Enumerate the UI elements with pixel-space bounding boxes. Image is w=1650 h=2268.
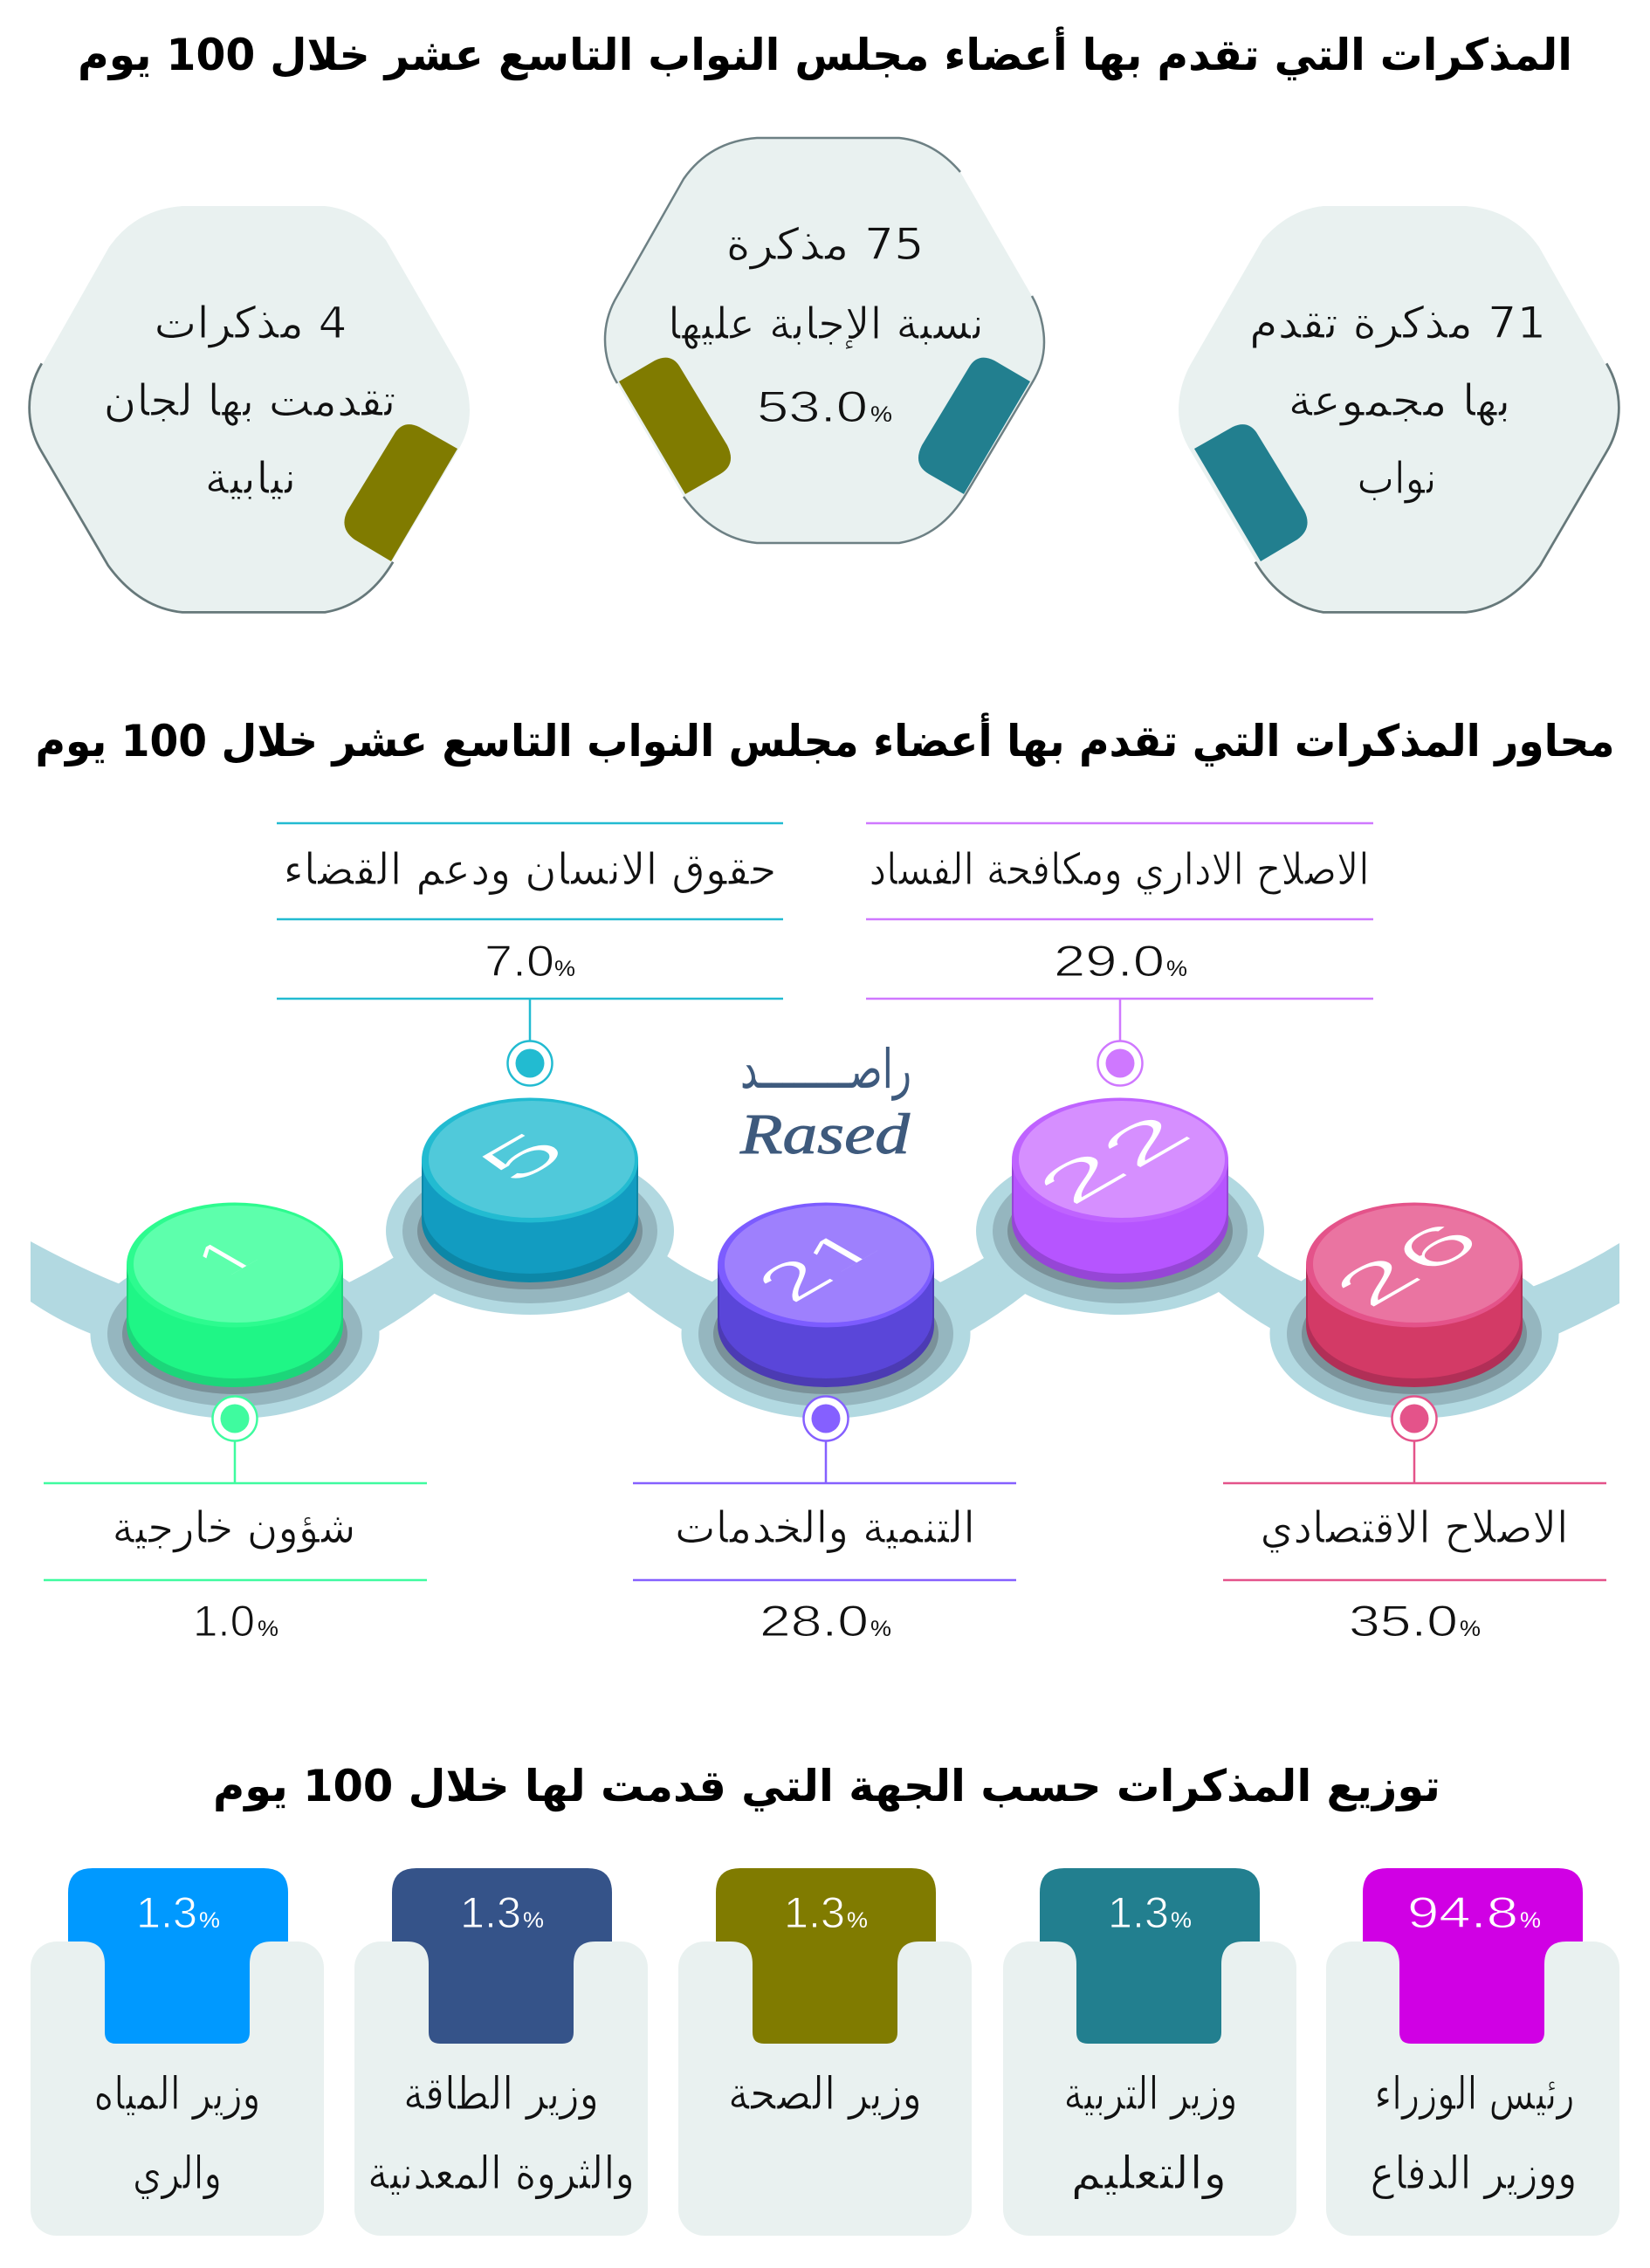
- logo: Rased: راصــــــــد: [740, 1037, 911, 1101]
- card: minister of health: %: [847, 1908, 868, 1933]
- card: minister of energy: وزير الطاقة: [403, 2068, 599, 2120]
- drum: 26 economic reform: 26: [1314, 1211, 1500, 1318]
- card: minister of education: %: [1171, 1908, 1192, 1933]
- text: committees: نيابية: [204, 453, 297, 504]
- card: minister of energy: 1.3: [460, 1888, 521, 1937]
- card: minister of health: وزير الصحة: [728, 2068, 922, 2120]
- card: minister of education: 1.3: [1108, 1888, 1169, 1937]
- callout: economic reform: الاصلاح الاقتصادي: [1261, 1502, 1568, 1553]
- callout: development and services: %: [870, 1617, 891, 1641]
- callout: economic reform: [1223, 1397, 1606, 1646]
- card: minister of education: والتعليم: [1070, 2148, 1227, 2200]
- callout: foreign affairs: 1.0: [193, 1597, 255, 1646]
- callout: human rights: حقوق الانسان ودعم القضاء: [283, 844, 777, 896]
- callout: development and services: 28.0: [760, 1597, 869, 1646]
- card: minister of water: والري: [133, 2148, 222, 2200]
- tab: olive accent: [619, 358, 731, 494]
- text: total: [668, 219, 984, 431]
- tab: teal accent: [918, 358, 1030, 494]
- card: prime minister and defence: رئيس الوزراء: [1374, 2068, 1575, 2120]
- callout: human rights: %: [554, 957, 575, 981]
- drum: 26 economic reform: [1269, 1203, 1559, 1419]
- drum: 22 administrative reform: 22: [1016, 1103, 1210, 1216]
- card: minister of education: وزير التربية: [1063, 2068, 1238, 2120]
- drum: 1 foreign affairs: 1: [176, 1229, 278, 1288]
- callout: development and services: التنمية والخدمات: [675, 1502, 975, 1554]
- card: minister of energy: %: [523, 1908, 544, 1933]
- card: minister of energy: والثروة المعدنية: [368, 2148, 635, 2200]
- callout: administrative reform: %: [1166, 957, 1187, 981]
- text: committees: تقدمت بها لجان: [103, 375, 396, 427]
- callout: administrative reform: الاصلاح الاداري ومكافحة الفساد: [870, 844, 1369, 896]
- callout: economic reform: %: [1460, 1617, 1481, 1641]
- card: minister of water: %: [199, 1908, 220, 1933]
- callout: development and services: [633, 1397, 1016, 1646]
- callout: foreign affairs: %: [258, 1617, 278, 1641]
- text: groups: نواب: [1357, 453, 1437, 504]
- drum: 5 human rights: [386, 1098, 674, 1315]
- panel: MP groups hexagon: [1179, 206, 1618, 611]
- card: prime minister and defence: [1326, 1868, 1619, 2236]
- drum: 5 human rights: 5: [459, 1120, 585, 1193]
- text: committees: [103, 298, 396, 504]
- callout: human rights: 7.0: [485, 937, 554, 986]
- panel: total hexagon: [605, 138, 1044, 543]
- card: minister of health: 1.3: [784, 1888, 845, 1937]
- drum: 22 administrative reform: [976, 1098, 1264, 1315]
- chart: road with five drums: [31, 1098, 1619, 1419]
- drum: 1 foreign affairs: [91, 1203, 379, 1419]
- card: prime minister and defence: ووزير الدفاع: [1371, 2148, 1577, 2200]
- card: prime minister and defence: 94.8: [1407, 1888, 1518, 1937]
- text: total: 75 مذكرة: [726, 219, 924, 270]
- logo: Rased: Rased: [739, 1103, 911, 1166]
- text: total: نسبة الإجابة عليها: [668, 299, 984, 350]
- logo: Rased: [739, 1037, 911, 1166]
- card: minister of water: وزير المياه: [94, 2068, 260, 2120]
- card: minister of health: [678, 1868, 972, 2236]
- callout: human rights: [277, 823, 783, 1086]
- card: minister of water: [31, 1868, 324, 2236]
- callout: foreign affairs: [44, 1397, 427, 1646]
- callout: administrative reform: [866, 823, 1373, 1086]
- card: prime minister and defence: %: [1520, 1908, 1541, 1933]
- panel: committees hexagon: [31, 206, 470, 611]
- title: section three: توزيع المذكرات حسب الجهة التي قدمت لها خلال 100 يوم: [213, 1761, 1440, 1812]
- text: total: 53.0: [757, 382, 868, 431]
- road band: [31, 1241, 1619, 1336]
- text: groups: 71 مذكرة تقدم: [1249, 298, 1546, 348]
- text: committees: 4 مذكرات: [155, 298, 347, 348]
- callout: foreign affairs: شؤون خارجية: [112, 1502, 356, 1554]
- title: section one: المذكرات التي تقدم بها أعضاء مجلس النواب التاسع عشر خلال 100 يوم: [78, 26, 1572, 81]
- card: minister of energy: [354, 1868, 648, 2236]
- text: total: %: [870, 402, 892, 427]
- tab: teal accent: [1194, 424, 1308, 561]
- card: minister of education: [1003, 1868, 1296, 2236]
- drum: 21 development: [681, 1203, 971, 1419]
- text: groups: [1249, 298, 1546, 504]
- card: minister of water: 1.3: [136, 1888, 197, 1937]
- tab: olive accent: [344, 424, 457, 561]
- drum: 21 development: 21: [738, 1220, 899, 1313]
- callout: economic reform: 35.0: [1349, 1597, 1458, 1646]
- text: groups: بها مجموعة: [1289, 375, 1510, 427]
- callout: administrative reform: 29.0: [1054, 937, 1165, 986]
